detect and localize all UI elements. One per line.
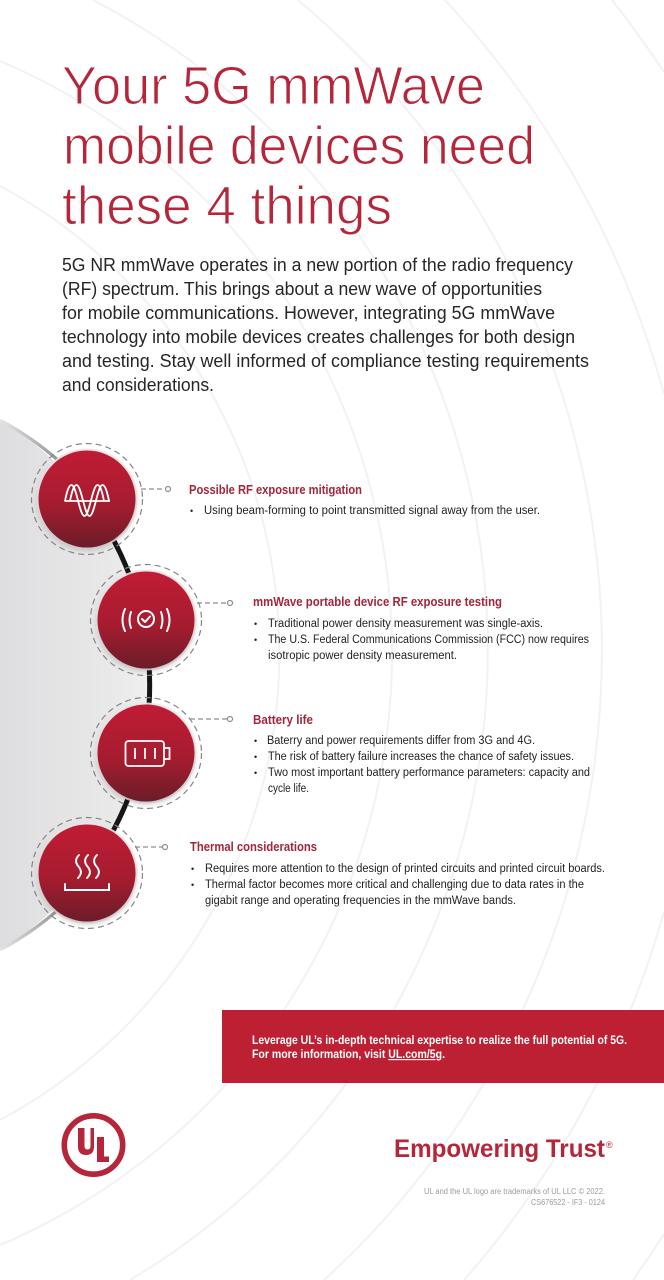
text: battery life — [253, 713, 590, 795]
intro paragraph — [62, 255, 589, 395]
intro paragraph: technology into mobile devices creates challenges for both design — [62, 327, 575, 347]
intro paragraph: 5G NR mmWave operates in a new portion of the radio frequency — [62, 255, 573, 275]
title: these 4 things — [62, 176, 392, 236]
text: thermal considerations: Thermal considerations — [190, 840, 317, 854]
text: thermal considerations — [190, 840, 605, 907]
connector 3 — [190, 716, 232, 722]
text: device RF exposure testing: Traditional power density measurement was single-axis. — [268, 618, 543, 630]
text: thermal considerations: gigabit range and operating frequencies in the mmWave bands. — [205, 895, 516, 907]
step 4: thermal node — [32, 818, 142, 928]
connector 1 — [141, 486, 170, 492]
text: RF exposure mitigation — [189, 483, 540, 517]
icon: signal check — [122, 609, 170, 631]
title: mobile devices need — [63, 116, 535, 176]
callout banner: For more information, visit UL.com/5g. — [252, 1049, 445, 1061]
text: RF exposure mitigation: Possible RF exposure mitigation — [189, 483, 362, 497]
text: thermal considerations: Requires more attention to the design of printed circuits and printed circuit boards. — [205, 863, 605, 875]
text: battery life: Battery life — [253, 713, 313, 727]
text: thermal considerations: • — [191, 864, 194, 874]
step 3: battery node — [90, 698, 202, 808]
text: device RF exposure testing: The U.S. Federal Communications Commission (FCC) now requires — [268, 634, 589, 646]
text: battery life: • — [254, 736, 257, 746]
intro paragraph: and considerations. — [62, 375, 214, 395]
intro paragraph: for mobile communications. However, integrating 5G mmWave — [62, 303, 555, 323]
text: device RF exposure testing: mmWave portable device RF exposure testing — [253, 595, 502, 609]
text: device RF exposure testing: • — [254, 635, 257, 645]
connector 4 — [135, 844, 168, 850]
large grey disc — [0, 420, 150, 950]
intro paragraph: and testing. Stay well informed of compliance testing requirements — [62, 351, 589, 371]
tagline: Empowering Trust: Empowering Trust — [394, 1135, 606, 1163]
text: thermal considerations: Thermal factor becomes more critical and challenging due to data rates in the — [205, 879, 584, 891]
text: RF exposure mitigation: Using beam-forming to point transmitted signal away from the user. — [204, 505, 540, 517]
tagline: Empowering Trust: ® — [606, 1140, 613, 1150]
icon: battery — [126, 741, 170, 766]
text: device RF exposure testing: • — [254, 619, 257, 629]
icon: sine waves — [64, 485, 110, 516]
text: device RF exposure testing — [253, 595, 589, 662]
title: Your 5G mmWave — [62, 56, 485, 116]
text: battery life: Baterry and power requirements differ from 3G and 4G. — [267, 735, 535, 747]
text: device RF exposure testing: isotropic power density measurement. — [268, 650, 457, 662]
legal text: CS676522 - IF3 - 0124 — [531, 1198, 605, 1207]
UL logo — [64, 1116, 123, 1174]
intro paragraph: (RF) spectrum. This brings about a new wave of opportunities — [62, 279, 542, 299]
connector 2 — [197, 600, 232, 606]
callout banner: Leverage UL’s in-depth technical expertise to realize the full potential of 5G. — [252, 1035, 627, 1047]
text: thermal considerations: • — [191, 880, 194, 890]
text: battery life: • — [254, 752, 257, 762]
black connecting arc — [108, 530, 150, 840]
text: battery life: • — [254, 768, 257, 778]
step 2: RF exposure testing node — [90, 564, 202, 676]
text: battery life: cycle life. — [268, 783, 309, 795]
step 1: RF exposure mitigation node — [32, 444, 142, 554]
text: RF exposure mitigation: • — [190, 506, 193, 516]
text: battery life: The risk of battery failure increases the chance of safety issues. — [268, 751, 574, 763]
callout banner — [222, 1010, 664, 1083]
icon: heat — [65, 855, 109, 890]
legal text — [424, 1187, 605, 1207]
text: battery life: Two most important battery performance parameters: capacity and — [268, 767, 590, 779]
title — [62, 56, 535, 236]
legal text: UL and the UL logo are trademarks of UL LLC © 2022. — [424, 1187, 605, 1196]
